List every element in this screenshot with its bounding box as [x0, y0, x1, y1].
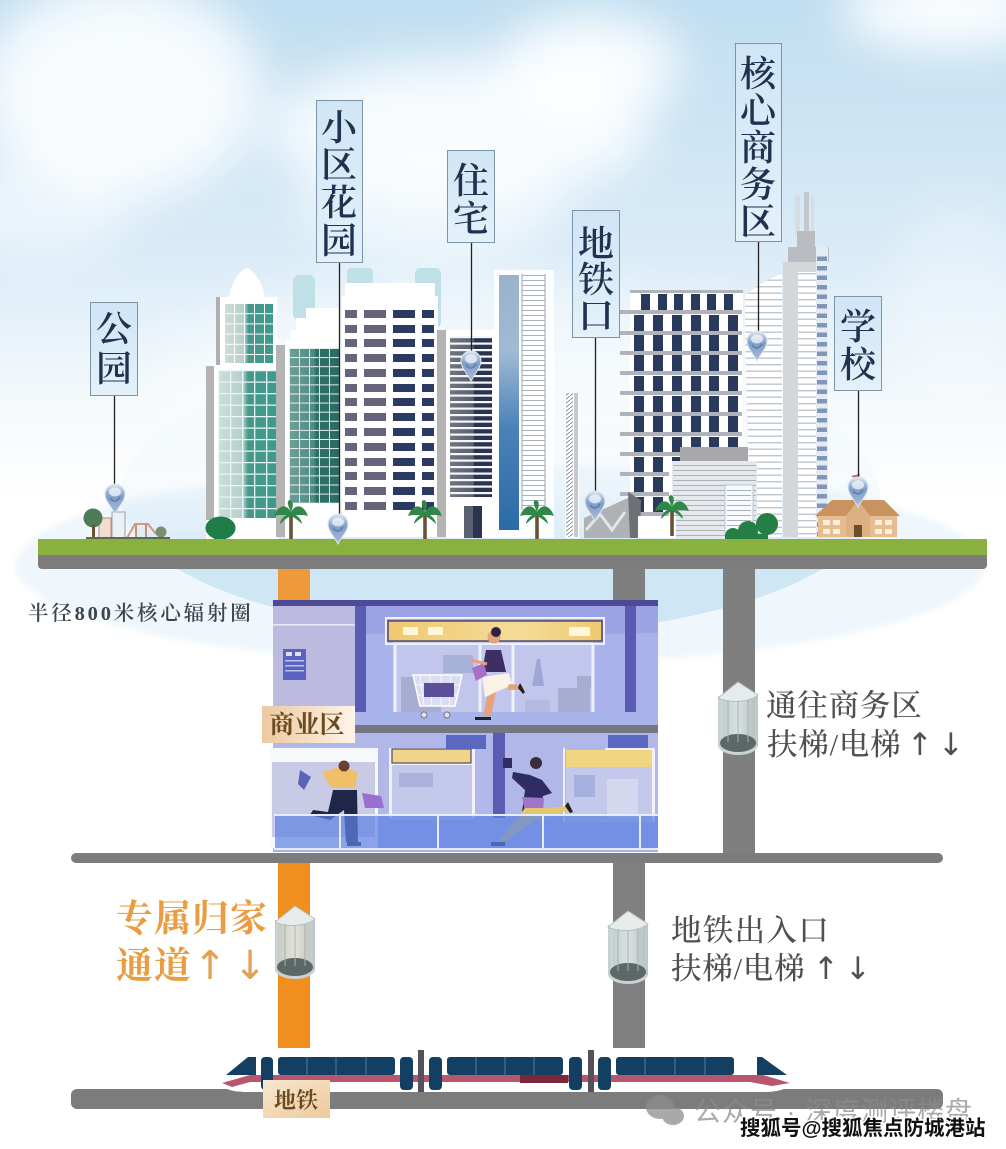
pillar: grey business district — [723, 569, 755, 855]
label: 核心商务区 — [736, 44, 782, 361]
floor bar: mall level — [71, 853, 943, 863]
text: metro entrance: 地铁出入口 — [671, 914, 830, 948]
text: to business district: ↓ — [938, 727, 964, 763]
label: 小区花园: 花 — [321, 183, 357, 223]
tag: 地铁: 地铁 — [274, 1088, 318, 1113]
ground: grey slab — [38, 545, 987, 569]
text: to business district: 通往商务区 — [766, 689, 922, 723]
metro train — [222, 1050, 790, 1092]
lower floor — [270, 733, 658, 848]
text: metro entrance — [671, 914, 871, 987]
building: metro station — [584, 492, 676, 538]
label: 住宅 — [448, 150, 494, 381]
building: narrow tower F — [565, 393, 579, 538]
text: to business district — [766, 689, 964, 763]
label: 学校: 学 — [840, 307, 876, 347]
text: metro entrance: 扶梯/电梯 — [671, 952, 805, 986]
building: background towers — [293, 268, 441, 328]
text: exclusive home passage: ↑ — [193, 943, 227, 989]
clouds — [0, 0, 1006, 480]
tag: 地铁 — [263, 1080, 330, 1118]
elevator: home passage — [275, 906, 315, 979]
building: grid office G — [620, 290, 743, 516]
text: exclusive home passage: 通道 — [116, 945, 192, 987]
sky background — [0, 0, 1006, 560]
label: 核心商务区: 核 — [740, 54, 778, 94]
radiation circle inner — [120, 355, 880, 635]
label: 地铁口: 铁 — [578, 260, 614, 300]
pillar: grey metro upper — [613, 569, 645, 600]
text: exclusive home passage: 专属归家 — [116, 898, 268, 940]
elevator: metro entrance — [608, 911, 648, 984]
building: white office C — [342, 283, 446, 537]
park playground — [84, 508, 170, 540]
label: 小区花园: 区 — [321, 145, 357, 185]
label: 住宅: 住 — [453, 161, 489, 201]
building: school — [815, 474, 900, 537]
skyline buildings — [84, 192, 900, 545]
label: 小区花园: 园 — [321, 221, 357, 261]
tag: 商业区 — [262, 706, 355, 743]
label: 核心商务区: 心 — [740, 91, 779, 131]
upper floor — [273, 600, 658, 733]
label: 地铁口 — [572, 210, 620, 521]
label: 小区花园 — [316, 100, 362, 544]
glass railing — [274, 815, 658, 850]
watermark: sohu: 搜狐号@搜狐焦点防城港站 — [740, 1116, 986, 1140]
elevator: business district — [718, 682, 758, 755]
panel: commercial mall — [270, 600, 658, 852]
shopper right — [491, 757, 573, 846]
text: exclusive home passage: ↓ — [233, 943, 267, 989]
pillar: orange home passage lower — [278, 855, 310, 1048]
tree: round tree — [206, 516, 236, 543]
label: 住宅: 宅 — [453, 199, 489, 239]
label: 公园: 公 — [96, 309, 132, 349]
shopper with trolley — [413, 627, 525, 720]
label: 学校 — [834, 296, 882, 507]
text: to business district: 扶梯/电梯 — [767, 728, 901, 762]
label: 公园: 园 — [96, 349, 132, 389]
label: 公园 — [90, 302, 138, 514]
tag: 商业区: 商业区 — [269, 711, 345, 739]
building: blue glass tower E — [494, 270, 554, 538]
tree: palms — [274, 495, 689, 541]
building: striped tower D — [446, 330, 496, 538]
building: teal tower B — [276, 308, 341, 538]
pillar: orange home passage upper — [278, 569, 310, 600]
floor bar: metro level — [71, 1089, 943, 1109]
label: 核心商务区: 区 — [740, 202, 776, 242]
label: 学校: 校 — [840, 345, 878, 385]
ground: grass — [38, 539, 987, 555]
watermark: wechat official account: 公众号 · 深度测评楼盘 — [694, 1097, 973, 1127]
text: exclusive home passage — [116, 898, 268, 989]
building: teal tower A — [206, 268, 278, 539]
text: metro entrance: ↑ — [813, 951, 839, 987]
pillar: grey metro lower — [613, 855, 645, 1048]
label: 小区花园: 小 — [321, 108, 359, 148]
label: 地铁口: 地 — [578, 224, 614, 264]
building: low block H — [672, 447, 757, 538]
label: 核心商务区: 商 — [740, 128, 776, 168]
label: 核心商务区: 务 — [740, 165, 776, 205]
building: skyscraper I — [745, 192, 829, 537]
radius caption: 半径800米核心辐射圈 — [28, 602, 254, 625]
label: 地铁口: 口 — [578, 296, 614, 336]
radiation circle outer — [15, 465, 985, 665]
text: to business district: ↑ — [907, 727, 933, 763]
tree: bushes — [725, 513, 778, 545]
text: metro entrance: ↓ — [845, 951, 871, 987]
shopper left — [298, 760, 384, 846]
